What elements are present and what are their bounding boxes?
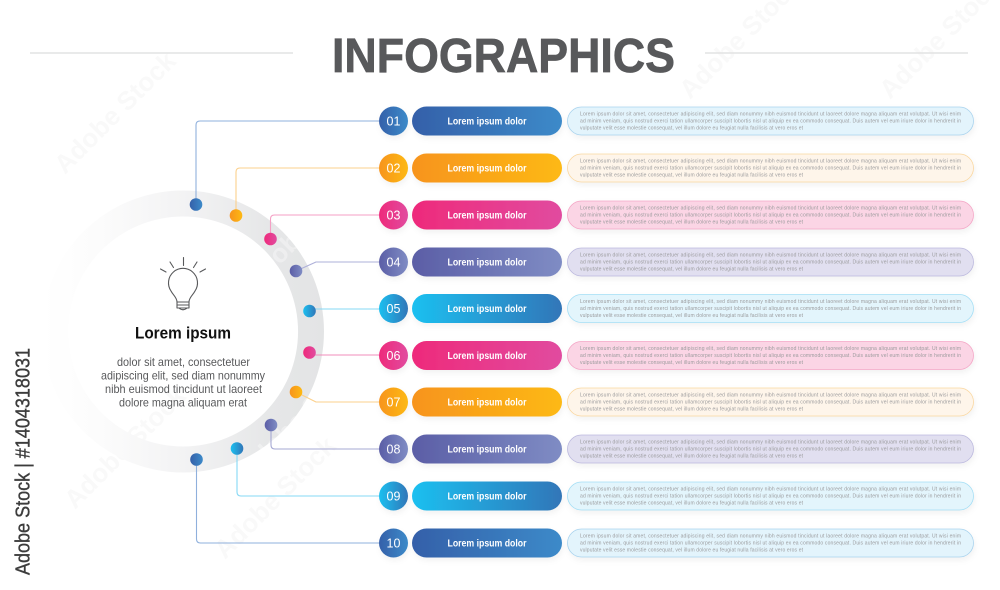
text box 06: ad minim veniam, quis nostrud exerci tation ullamcorper suscipit lobortis nisl ut aliquip ex ea commodo consequat. Duis autem vel eum iriure dolor in hendrerit in xyxy=(580,353,961,359)
text box 01: ad minim veniam, quis nostrud exerci tation ullamcorper suscipit lobortis nisl ut aliquip ex ea commodo consequat. Duis autem vel eum iriure dolor in hendrerit in xyxy=(580,119,961,125)
title: INFOGRAPHICS xyxy=(332,30,675,83)
row 03 xyxy=(379,200,974,230)
text box 10: Lorem ipsum dolor sit amet, consectetuer adipiscing elit, sed diam nonummy nibh euismod tincidunt ut laoreet dolore magna aliquam erat volutpat. Ut wisi enim xyxy=(580,534,961,540)
label pill 08: Lorem ipsum dolor xyxy=(448,444,527,456)
number badge 08 xyxy=(379,434,408,464)
text box 08 xyxy=(568,435,974,463)
text box 02: Lorem ipsum dolor sit amet, consectetuer adipiscing elit, sed diam nonummy nibh euismod tincidunt ut laoreet dolore magna aliquam erat volutpat. Ut wisi enim xyxy=(580,159,961,165)
text box 09 xyxy=(568,482,974,510)
label pill 01: Lorem ipsum dolor xyxy=(448,116,527,128)
row 02 xyxy=(379,154,974,182)
text box 08: ad minim veniam, quis nostrud exerci tation ullamcorper suscipit lobortis nisl ut aliquip ex ea commodo consequat. Duis autem vel eum iriure dolor in hendrerit in xyxy=(580,447,961,453)
text box 04: Lorem ipsum dolor sit amet, consectetuer adipiscing elit, sed diam nonummy nibh euismod tincidunt ut laoreet dolore magna aliquam erat volutpat. Ut wisi enim xyxy=(580,253,961,259)
number badge 01 xyxy=(379,106,408,136)
icon: light bulb xyxy=(160,258,206,310)
label pill 06: Lorem ipsum dolor xyxy=(448,351,527,362)
text box 10 xyxy=(568,529,974,557)
text box 02: vulputate velit esse molestie consequat, vel illum dolore eu feugiat nulla facilisis at vero eros et xyxy=(580,172,804,178)
text box 10: ad minim veniam, quis nostrud exerci tation ullamcorper suscipit lobortis nisl ut aliquip ex ea commodo consequat. Duis autem vel eum iriure dolor in hendrerit in xyxy=(580,541,961,547)
label pill 09 xyxy=(412,482,562,510)
text box 06: vulputate velit esse molestie consequat, vel illum dolore eu feugiat nulla facilisis at vero eros et xyxy=(580,360,804,366)
label pill 09: Lorem ipsum dolor xyxy=(448,492,527,502)
ring diagram xyxy=(42,121,379,543)
label pill 10 xyxy=(412,528,562,558)
label pill 02 xyxy=(412,154,562,182)
number badge 04: 04 xyxy=(387,256,400,270)
center description: dolore magna aliquam erat xyxy=(119,396,248,410)
text box 07: Lorem ipsum dolor sit amet, consectetuer adipiscing elit, sed diam nonummy nibh euismod tincidunt ut laoreet dolore magna aliquam erat volutpat. Ut wisi enim xyxy=(580,393,961,399)
text box 02: ad minim veniam, quis nostrud exerci tation ullamcorper suscipit lobortis nisl ut aliquip ex ea commodo consequat. Duis autem vel eum iriure dolor in hendrerit in xyxy=(580,166,961,172)
text box 10: vulputate velit esse molestie consequat, vel illum dolore eu feugiat nulla facilisis at vero eros et xyxy=(580,548,804,554)
center description xyxy=(101,355,265,410)
label pill 04: Lorem ipsum dolor xyxy=(448,258,527,268)
text box 03: ad minim veniam, quis nostrud exerci tation ullamcorper suscipit lobortis nisl ut aliquip ex ea commodo consequat. Duis autem vel eum iriure dolor in hendrerit in xyxy=(580,213,961,219)
number badge 04 xyxy=(379,248,408,276)
number badge 01: 01 xyxy=(387,114,400,128)
text box 05: vulputate velit esse molestie consequat, vel illum dolore eu feugiat nulla facilisis at vero eros et xyxy=(580,313,804,319)
text box 01: Lorem ipsum dolor sit amet, consectetuer adipiscing elit, sed diam nonummy nibh euismod tincidunt ut laoreet dolore magna aliquam erat volutpat. Ut wisi enim xyxy=(580,112,961,118)
text box 04: ad minim veniam, quis nostrud exerci tation ullamcorper suscipit lobortis nisl ut aliquip ex ea commodo consequat. Duis autem vel eum iriure dolor in hendrerit in xyxy=(580,260,961,266)
ring dots xyxy=(190,198,316,466)
ring watermark: Adobe Stock xyxy=(233,350,367,484)
row 08 xyxy=(379,434,974,464)
label pill 01 xyxy=(412,106,562,136)
grey ring xyxy=(42,190,324,472)
row 05 xyxy=(379,294,974,323)
number badge 05: 05 xyxy=(387,302,400,316)
number badge 05 xyxy=(379,294,408,323)
label pill 05: Lorem ipsum dolor xyxy=(448,304,527,315)
text box 07 xyxy=(568,388,974,416)
number badge 06 xyxy=(379,341,408,370)
ring watermark: Adobe xyxy=(238,216,316,294)
center description: dolor sit amet, consectetuer xyxy=(117,355,250,369)
side stock credit: Adobe Stock | #1404318031 xyxy=(12,348,34,575)
ring watermark xyxy=(233,216,367,484)
label pill 07: Lorem ipsum dolor xyxy=(448,398,527,408)
label pill 02: Lorem ipsum dolor xyxy=(448,164,527,174)
row 06 xyxy=(379,341,974,370)
number badge 09: 09 xyxy=(387,490,400,504)
text box 05 xyxy=(568,294,974,322)
label pill 08 xyxy=(412,434,562,464)
text box 06: Lorem ipsum dolor sit amet, consectetuer adipiscing elit, sed diam nonummy nibh euismod tincidunt ut laoreet dolore magna aliquam erat volutpat. Ut wisi enim xyxy=(580,346,961,352)
text box 07: ad minim veniam, quis nostrud exerci tation ullamcorper suscipit lobortis nisl ut aliquip ex ea commodo consequat. Duis autem vel eum iriure dolor in hendrerit in xyxy=(580,400,961,406)
text box 02 xyxy=(568,154,974,182)
row 10 xyxy=(379,528,974,558)
label pill 06 xyxy=(412,341,562,370)
label pill 04 xyxy=(412,248,562,276)
text box 09: Lorem ipsum dolor sit amet, consectetuer adipiscing elit, sed diam nonummy nibh euismod tincidunt ut laoreet dolore magna aliquam erat volutpat. Ut wisi enim xyxy=(580,487,961,493)
label pill 07 xyxy=(412,388,562,416)
text box 03: vulputate velit esse molestie consequat, vel illum dolore eu feugiat nulla facilisis at vero eros et xyxy=(580,220,804,226)
text box 06 xyxy=(568,342,974,370)
background watermark: Adobe Stock xyxy=(208,430,342,564)
row 07 xyxy=(379,388,974,416)
connector lines xyxy=(196,121,379,543)
number badge 02: 02 xyxy=(387,162,400,176)
row 09 xyxy=(379,482,974,510)
number badge 09 xyxy=(379,482,408,510)
text box 04: vulputate velit esse molestie consequat, vel illum dolore eu feugiat nulla facilisis at vero eros et xyxy=(580,266,804,272)
text box 03: Lorem ipsum dolor sit amet, consectetuer adipiscing elit, sed diam nonummy nibh euismod tincidunt ut laoreet dolore magna aliquam erat volutpat. Ut wisi enim xyxy=(580,206,961,212)
center heading: Lorem ipsum xyxy=(135,324,231,342)
background watermark: Adobe Stock xyxy=(48,45,182,179)
number badge 07: 07 xyxy=(387,396,400,410)
number badge 07 xyxy=(379,388,408,416)
text box 09: vulputate velit esse molestie consequat, vel illum dolore eu feugiat nulla facilisis at vero eros et xyxy=(580,500,804,506)
text box 05: Lorem ipsum dolor sit amet, consectetuer adipiscing elit, sed diam nonummy nibh euismod tincidunt ut laoreet dolore magna aliquam erat volutpat. Ut wisi enim xyxy=(580,299,961,305)
number badge 10 xyxy=(379,528,408,558)
number badge 03 xyxy=(379,200,408,230)
label pill 03: Lorem ipsum dolor xyxy=(448,210,527,222)
text box 04 xyxy=(568,248,974,276)
text box 01: vulputate velit esse molestie consequat, vel illum dolore eu feugiat nulla facilisis at vero eros et xyxy=(580,126,804,132)
text box 05: ad minim veniam, quis nostrud exerci tation ullamcorper suscipit lobortis nisl ut aliquip ex ea commodo consequat. Duis autem vel eum iriure dolor in hendrerit in xyxy=(580,306,961,312)
label pill 05 xyxy=(412,294,562,323)
number badge 08: 08 xyxy=(387,442,400,456)
text box 09: ad minim veniam, quis nostrud exerci tation ullamcorper suscipit lobortis nisl ut aliquip ex ea commodo consequat. Duis autem vel eum iriure dolor in hendrerit in xyxy=(580,494,961,500)
text box 08: vulputate velit esse molestie consequat, vel illum dolore eu feugiat nulla facilisis at vero eros et xyxy=(580,454,804,460)
background watermark: Adobe Stock xyxy=(58,380,192,514)
number badge 02 xyxy=(379,154,408,182)
text box 07: vulputate velit esse molestie consequat, vel illum dolore eu feugiat nulla facilisis at vero eros et xyxy=(580,406,804,412)
row 01 xyxy=(379,106,974,136)
center description: nibh euismod tincidunt ut laoreet xyxy=(105,382,263,396)
center description: adipiscing elit, sed diam nonummy xyxy=(101,368,265,382)
number badge 06: 06 xyxy=(387,349,400,363)
row 04 xyxy=(379,248,974,276)
text box 03 xyxy=(568,201,974,229)
number badge 10: 10 xyxy=(387,536,400,550)
text box 08: Lorem ipsum dolor sit amet, consectetuer adipiscing elit, sed diam nonummy nibh euismod tincidunt ut laoreet dolore magna aliquam erat volutpat. Ut wisi enim xyxy=(580,440,961,446)
text box 01 xyxy=(568,107,974,135)
number badge 03: 03 xyxy=(387,208,400,222)
label pill 10: Lorem ipsum dolor xyxy=(448,538,527,550)
label pill 03 xyxy=(412,200,562,230)
